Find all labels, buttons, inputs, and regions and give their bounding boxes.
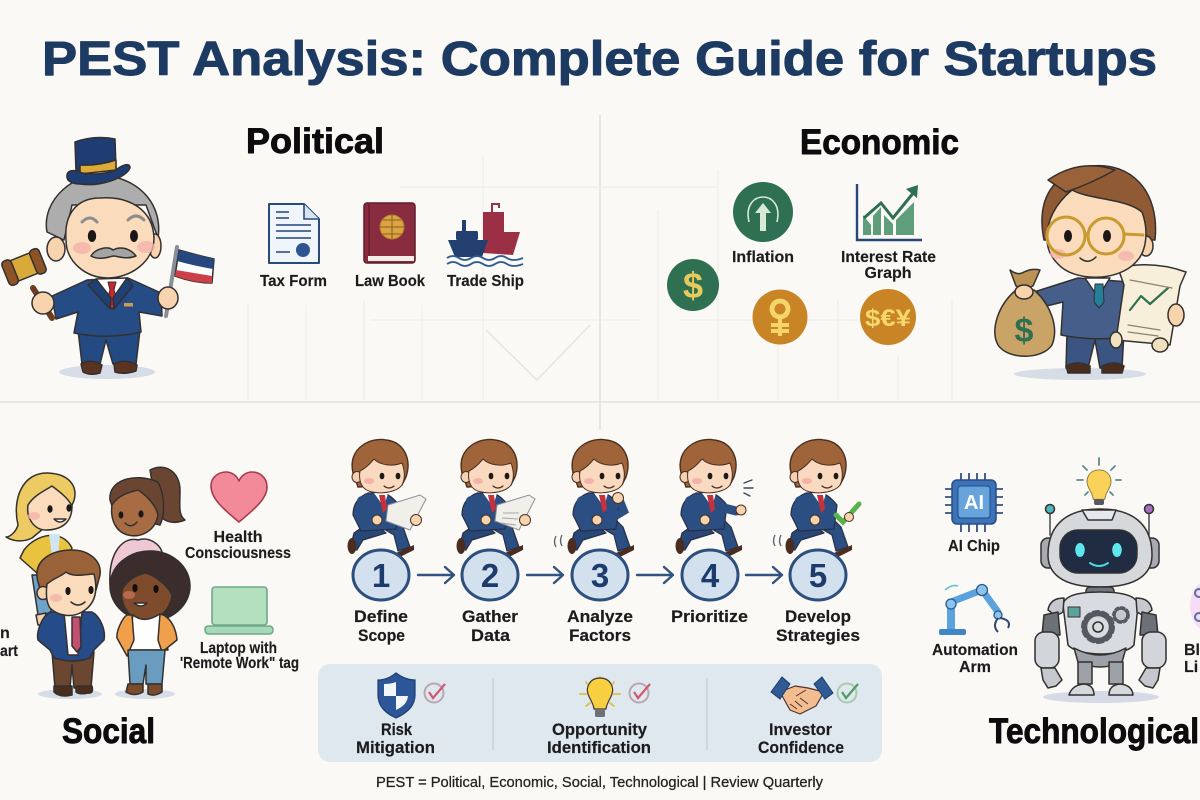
icon: currency coin: $€¥ (865, 305, 912, 332)
label: investor confidence: Confidence (758, 738, 844, 757)
icon: orange coin (752, 290, 808, 344)
panel: technological (932, 458, 1200, 751)
icon: interest rate graph (857, 184, 922, 240)
label: laptop with remote work tag: Laptop with (200, 640, 277, 657)
label: opportunity identification: Identification (547, 738, 651, 757)
icon: ai chip: AI (964, 492, 984, 514)
icon: robot light bulb (1077, 458, 1121, 505)
icon: tax form (269, 204, 319, 263)
panel: five step process (348, 439, 860, 645)
icon: dollar coin: $ (683, 265, 703, 306)
step 2 circle (462, 550, 518, 600)
icon: trade ship (447, 204, 523, 266)
label: tax form: Tax Form (260, 273, 327, 290)
step 1 label: Define (354, 607, 408, 626)
panel: political (1, 122, 524, 379)
label: interest rate graph: Interest Rate (841, 249, 936, 266)
icon: law book (364, 203, 415, 263)
runner 3 thinking (554, 439, 634, 557)
icon: heart (211, 472, 267, 522)
character: economist (995, 166, 1186, 380)
title: PEST Analysis: Complete Guide for Startups (42, 33, 1157, 86)
icon: currency coin (860, 289, 916, 345)
step 3 label: Factors (569, 626, 631, 645)
label: laptop tag line 2: 'Remote Work" tag (180, 655, 299, 672)
clipped label: link: Li (1184, 659, 1198, 676)
step 5 circle (790, 550, 846, 600)
icon: laptop (205, 587, 273, 634)
step 3 label (567, 607, 633, 645)
arrow 2 to 3 (527, 567, 563, 583)
runner 2 with document (456, 439, 535, 557)
step 1 label (354, 607, 408, 645)
icon: inflation (733, 182, 793, 242)
runner 1 with book (348, 439, 426, 557)
arrow 3 to 4 (637, 567, 673, 583)
label: inflation: Inflation (732, 249, 794, 266)
label: interest rate graph line 2: Graph (864, 265, 912, 282)
step 1 label: Scope (358, 626, 405, 645)
icon: shield (378, 673, 415, 718)
icon: handshake (771, 677, 833, 714)
label: opportunity identification (547, 720, 651, 757)
step 2 circle: 2 (481, 557, 499, 594)
step 4 circle (682, 550, 738, 600)
label: health consciousness: Health (214, 529, 262, 546)
clipped label: blockchain: Bl (1184, 642, 1200, 659)
person: man in blue blazer (37, 550, 104, 699)
label: investor confidence: Investor (769, 720, 832, 739)
step 4 label: Prioritize (671, 607, 748, 626)
step 3 circle: 3 (591, 557, 609, 594)
label: risk mitigation: Risk (381, 720, 412, 739)
step 2 label: Gather (462, 607, 518, 626)
character group: four people (6, 467, 190, 699)
label: investor confidence (758, 720, 844, 757)
step 3 circle (572, 550, 628, 600)
label: automation arm: Automation (932, 642, 1018, 659)
icon: blockchain link (clipped) (1190, 581, 1200, 631)
clipped label fragment: n (0, 625, 10, 642)
label: trade ship: Trade Ship (447, 273, 524, 290)
icon: dollar coin (667, 259, 719, 311)
step 2 label (462, 607, 518, 645)
icon: automation arm (939, 584, 1009, 635)
heading: economic: Economic (800, 123, 959, 162)
panel: benefits (318, 664, 882, 762)
icon: light bulb (580, 677, 620, 717)
character: politician (1, 138, 214, 379)
runner 4 pointing (676, 439, 753, 557)
character: robot (1035, 504, 1166, 703)
label: ai chip: AI Chip (948, 538, 1000, 555)
step 5 label (776, 607, 860, 645)
step 1 circle: 1 (372, 557, 390, 594)
character: economist: $ (1015, 312, 1034, 350)
person: woman with ponytail (110, 467, 185, 585)
label: risk mitigation: Mitigation (356, 738, 435, 757)
heading: political: Political (246, 122, 384, 161)
arrow 4 to 5 (746, 567, 782, 583)
icon: check badge red 2 (630, 684, 650, 702)
label: risk mitigation (356, 720, 435, 757)
arrow 1 to 2 (418, 567, 454, 583)
label: law book: Law Book (355, 273, 425, 290)
step 5 label: Strategies (776, 626, 860, 645)
panel: social (0, 467, 299, 751)
step 2 label: Data (471, 626, 511, 645)
clipped label fragment line 2: art (0, 643, 19, 660)
person: blonde woman (6, 473, 75, 625)
step 4 circle: 4 (701, 557, 720, 594)
step 5 label: Develop (785, 607, 851, 626)
panel: economic (667, 123, 1186, 380)
icon: check badge red (424, 684, 445, 702)
heading: social: Social (62, 712, 155, 751)
footer note: PEST = Political, Economic, Social, Technological | Review Quarterly (376, 775, 824, 791)
label: automation arm line 2: Arm (959, 659, 991, 676)
person: woman in orange cardigan (110, 551, 190, 699)
runner 5 with check (774, 439, 859, 557)
icon: ai chip (945, 473, 1003, 532)
step 3 label: Analyze (567, 607, 633, 626)
step 1 circle (353, 550, 409, 600)
icon: check badge green (838, 684, 858, 702)
step 5 circle: 5 (809, 557, 827, 594)
label: opportunity identification: Opportunity (552, 720, 648, 739)
label: health consciousness line 2: Consciousness (185, 545, 291, 562)
